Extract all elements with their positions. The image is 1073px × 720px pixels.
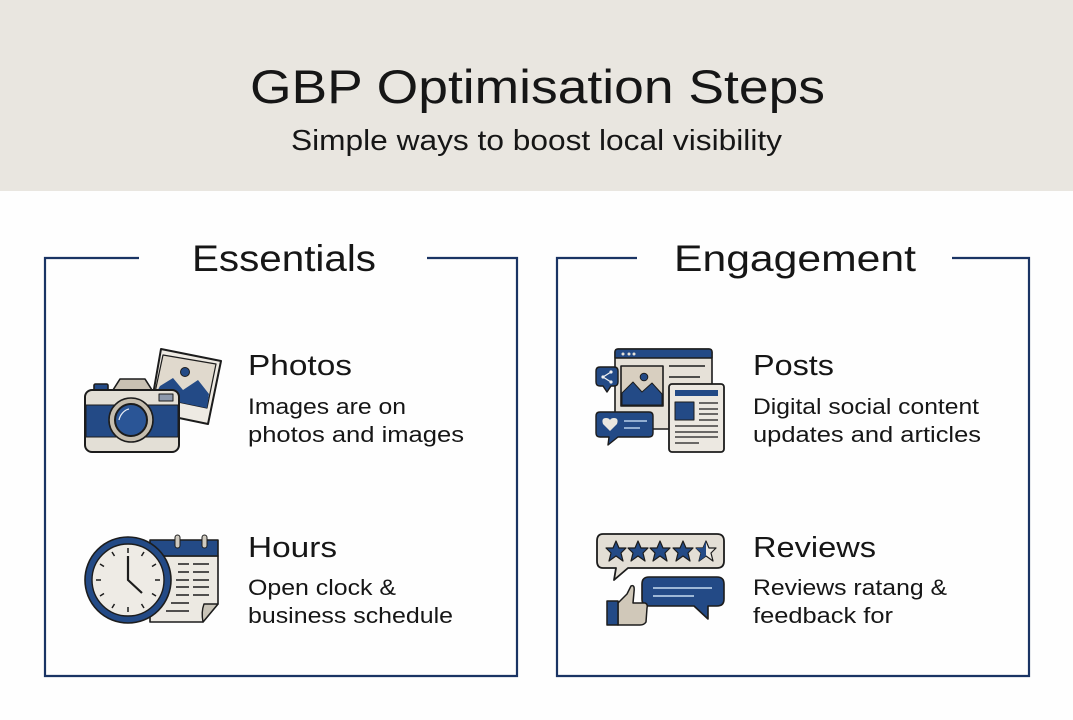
title: GBP Optimisation Steps — [250, 60, 825, 113]
text: hours: business schedule — [248, 603, 453, 628]
text: photos: photos and images — [248, 422, 464, 447]
text: photos: Photos — [248, 350, 352, 382]
text: posts: Posts — [753, 350, 834, 382]
text: hours: Open clock & — [248, 575, 396, 600]
icon: camera and photo — [85, 349, 221, 452]
text: photos: Images are on — [248, 394, 406, 419]
text: reviews: Reviews — [753, 532, 876, 564]
heading: engagement: Engagement — [674, 238, 917, 279]
panel: engagement — [557, 238, 1029, 676]
header band — [0, 0, 1073, 191]
heading: essentials: Essentials — [192, 238, 376, 279]
text: posts: Digital social content — [753, 394, 980, 419]
icon: stars, speech bubbles and thumb — [597, 534, 724, 625]
subtitle: Simple ways to boost local visibility — [291, 125, 783, 157]
text: posts: updates and articles — [753, 422, 981, 447]
icon: clock and calendar — [85, 535, 218, 623]
text: reviews: Reviews ratang & — [753, 575, 947, 600]
text: reviews — [753, 532, 947, 628]
panel: essentials — [45, 238, 517, 676]
icon: web post and article — [596, 349, 724, 452]
text: hours: Hours — [248, 532, 337, 564]
text: posts — [753, 350, 981, 447]
text: reviews: feedback for — [753, 603, 894, 628]
text: photos — [248, 350, 464, 447]
text: hours — [248, 532, 453, 628]
